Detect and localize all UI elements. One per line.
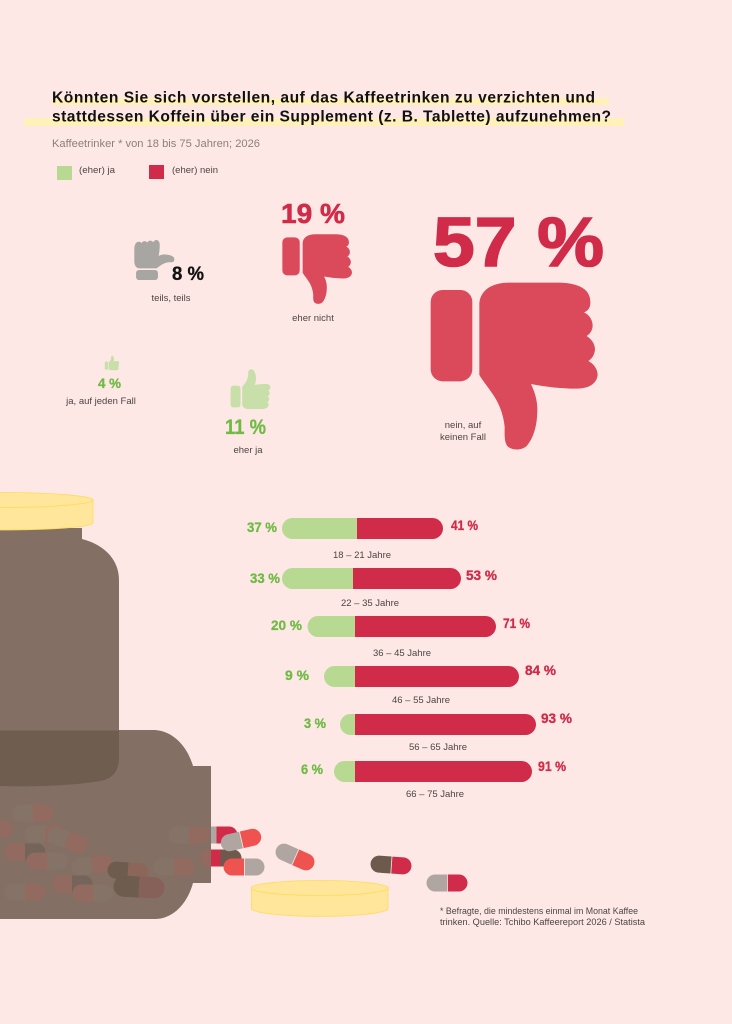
row: 66-75: 66 – 75 Jahre xyxy=(406,789,464,800)
stat: 11 percent eher ja: eher ja xyxy=(233,445,263,456)
stat: 19 percent eher nicht: 19 % xyxy=(281,198,345,229)
row: 18-21: 18 – 21 Jahre xyxy=(333,550,391,561)
row: 22-35: 33 % xyxy=(250,570,281,586)
stat: 8 percent teils, teils xyxy=(134,240,204,304)
row: 36-45: 36 – 45 Jahre xyxy=(373,648,431,659)
row: 56-65: 56 – 65 Jahre xyxy=(409,742,467,753)
stat: 8 percent teils, teils: 8 % xyxy=(172,263,204,285)
illustration: jar overlap xyxy=(0,730,119,786)
stat: 11 percent eher ja xyxy=(225,369,270,456)
title xyxy=(24,90,624,126)
illustration: upright jar xyxy=(0,528,119,786)
stat: 19 percent eher nicht xyxy=(281,198,352,324)
row: 46-55: 46 – 55 Jahre xyxy=(392,695,450,706)
title: stattdessen Koffein über ein Supplement (z. B. Tablette) aufzunehmen? xyxy=(52,108,611,126)
row: 36-45: 20 % xyxy=(271,617,303,633)
stat: 4 percent ja, auf jeden Fall xyxy=(65,356,136,407)
stat: 57 percent nein, auf keinen Fall: nein, auf xyxy=(445,420,482,431)
stat: 19 percent eher nicht: eher nicht xyxy=(292,313,334,324)
row: 56-65: 3 % xyxy=(304,715,327,731)
stat: 57 percent nein, auf keinen Fall: keinen Fall xyxy=(440,432,486,443)
subtitle: Kaffeetrinker * von 18 bis 75 Jahren; 2026 xyxy=(52,138,260,150)
icon: medium thumb down xyxy=(282,234,352,304)
stat: 57 percent nein, auf keinen Fall: 57 % xyxy=(433,203,604,281)
stat: 57 percent nein, auf keinen Fall xyxy=(431,203,604,449)
icon: medium thumb up xyxy=(231,369,270,409)
row: 56-65: 93 % xyxy=(541,710,573,726)
illustration: jar lid xyxy=(0,492,93,530)
stat: 8 percent teils, teils: teils, teils xyxy=(151,293,191,304)
row: 46-55: 84 % xyxy=(525,662,557,678)
stat: 4 percent ja, auf jeden Fall: 4 % xyxy=(98,375,122,391)
footnote xyxy=(440,906,645,927)
row: 18-21 xyxy=(247,517,478,561)
row: 18-21: 41 % xyxy=(451,517,478,533)
row: 56-65 xyxy=(304,710,573,753)
row: 22-35 xyxy=(250,567,498,609)
icon: sideways thumb xyxy=(134,240,174,280)
row: 66-75: 6 % xyxy=(301,761,324,777)
row: 46-55: 9 % xyxy=(285,667,310,683)
footnote: trinken. Quelle: Tchibo Kaffeereport 2026 / Statista xyxy=(440,917,645,927)
illustration: tipped jar xyxy=(0,730,211,919)
stat: 11 percent eher ja: 11 % xyxy=(225,416,266,439)
row: 36-45: 71 % xyxy=(503,615,530,631)
illustration: capsules seen through jar xyxy=(0,804,211,902)
legend: (eher) ja xyxy=(79,165,116,176)
row: 36-45 xyxy=(271,615,530,659)
row: 22-35: 53 % xyxy=(466,567,498,583)
row: 66-75 xyxy=(301,758,566,800)
icon: small thumb up xyxy=(105,356,119,370)
icon: large thumb down xyxy=(431,283,598,449)
bar chart: age groups xyxy=(247,517,573,800)
legend xyxy=(57,165,218,180)
illustration: lid on floor xyxy=(251,880,388,916)
row: 22-35: 22 – 35 Jahre xyxy=(341,598,399,609)
row: 46-55 xyxy=(285,662,557,706)
title: Könnten Sie sich vorstellen, auf das Kaffeetrinken zu verzichten und xyxy=(52,90,595,106)
row: 66-75: 91 % xyxy=(538,758,566,774)
row: 18-21: 37 % xyxy=(247,519,278,535)
footnote: * Befragte, die mindestens einmal im Monat Kaffee xyxy=(440,906,638,916)
stat: 4 percent ja, auf jeden Fall: ja, auf jeden Fall xyxy=(65,396,136,407)
legend: (eher) nein xyxy=(172,165,218,176)
illustration: loose capsules behind the jar opening xyxy=(196,826,468,892)
